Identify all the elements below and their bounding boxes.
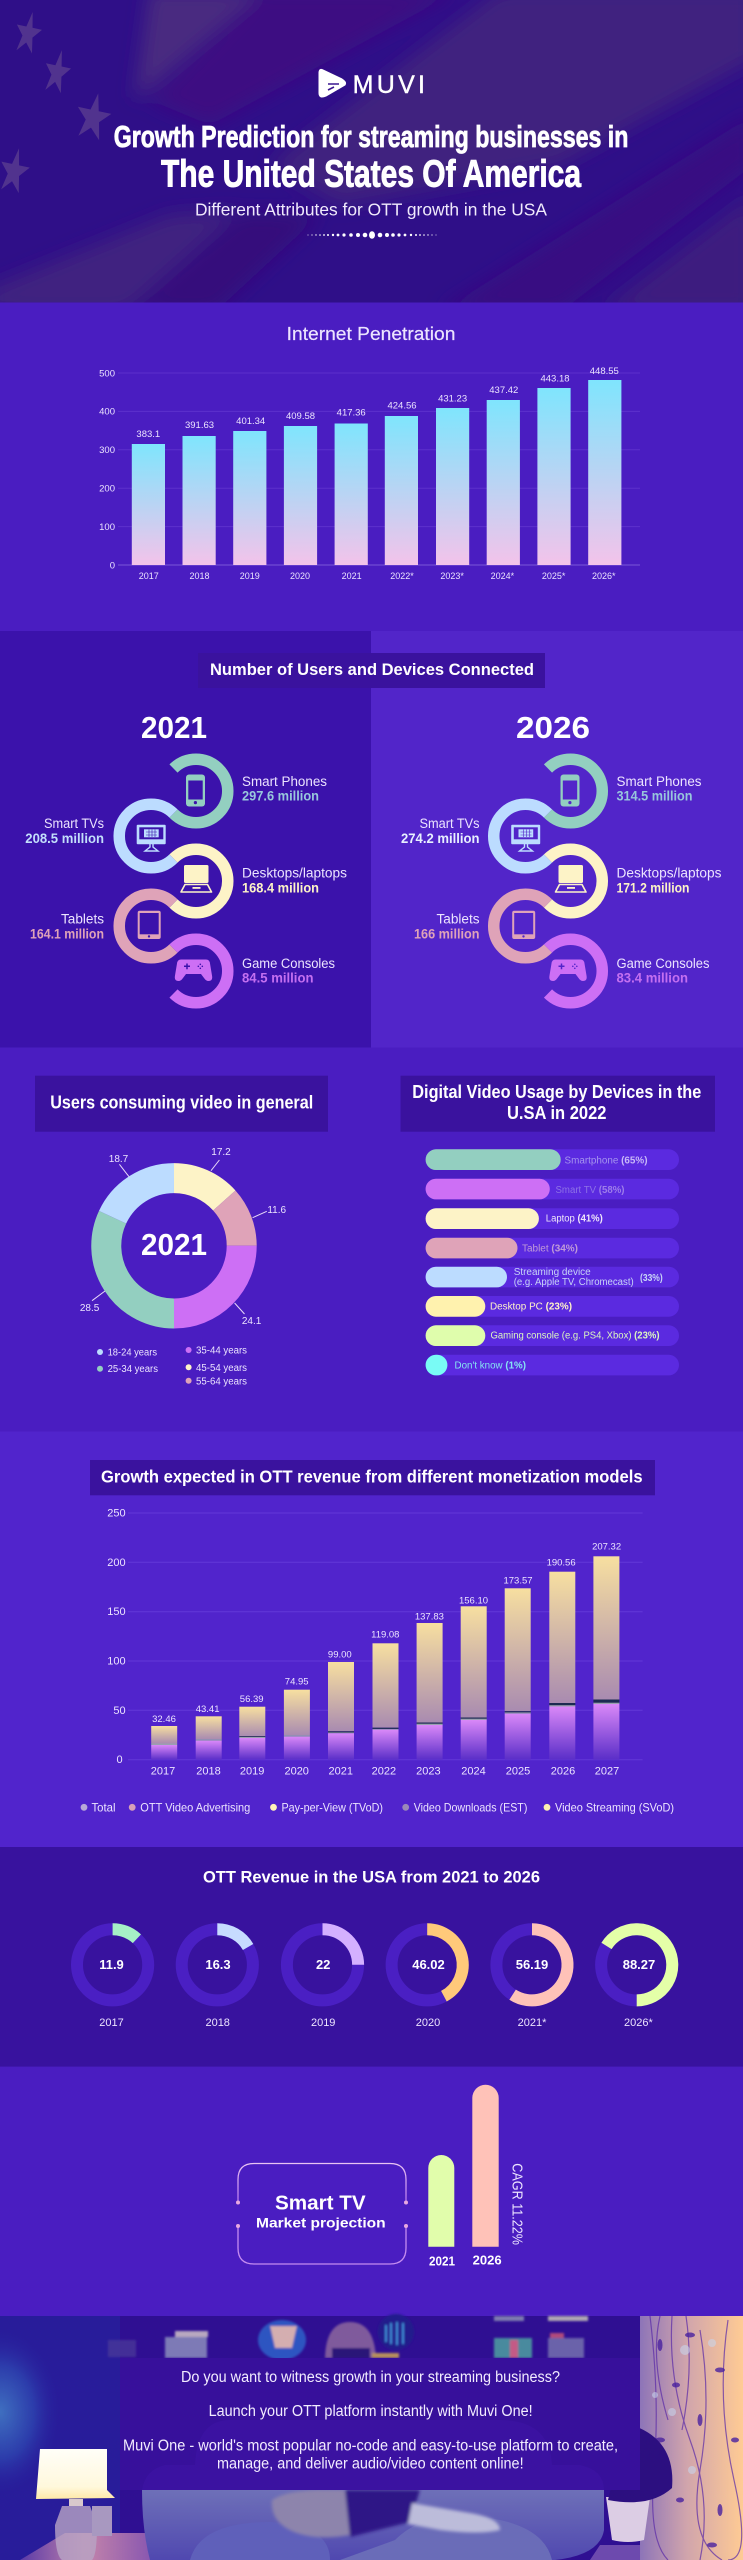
device labels 2026: Tablets — [436, 912, 480, 927]
callout: smart TV market projection: Smart TV — [275, 2192, 366, 2214]
bar chart: internet penetration: 431.23 — [438, 394, 467, 404]
heading: users and devices: Number of Users and Devices Connected — [210, 660, 534, 679]
bar list: device usage: Desktop PC (23%) — [490, 1302, 572, 1312]
bar chart: internet penetration: 448.55 — [590, 366, 619, 377]
device labels 2021: 168.4 million — [242, 880, 319, 895]
text overlay box — [120, 2358, 640, 2490]
bar chart: internet penetration: 383.1 — [136, 429, 160, 440]
stacked bar chart: monetization models: 207.32 — [592, 1542, 621, 1552]
device labels 2026: Desktops/laptops — [616, 866, 722, 881]
ring chart: revenue by year: 2026* — [624, 2017, 653, 2029]
ring chart: revenue by year: 2021* — [518, 2017, 547, 2029]
legend: monetization models: Video Streaming (SVoD) — [555, 1800, 674, 1814]
bar: 2021 smart TV: 2021 — [429, 2254, 455, 2269]
call to action text: Launch your OTT platform instantly with Muvi One! — [209, 2403, 533, 2420]
year 2021: 2021 — [141, 711, 207, 745]
bar: 2026 smart TV: 2026 — [473, 2252, 502, 2267]
bar list: device usage: (e.g. Apple TV, Chromecast) — [514, 1277, 634, 1288]
panel: OTT revenue rings — [0, 1847, 743, 2067]
plant and pot — [606, 2425, 672, 2542]
curtain — [640, 2316, 743, 2560]
panel: OTT revenue growth — [0, 1432, 743, 1847]
bar chart: internet penetration: 409.58 — [286, 411, 315, 422]
bar chart: internet penetration: 401.34 — [236, 416, 265, 427]
legend: age groups: 18-24 years — [108, 1348, 157, 1358]
heading: internet penetration: Internet Penetration — [287, 323, 455, 344]
stacked bar chart: monetization models: 99.00 — [328, 1650, 352, 1660]
device labels 2021: Smart TVs — [44, 816, 104, 831]
stacked bar chart: monetization models: 200 — [107, 1557, 126, 1569]
stacked bar chart: monetization models: 0 — [116, 1754, 123, 1766]
bar chart: internet penetration: 2017 — [139, 571, 159, 581]
panel: internet penetration — [0, 302, 743, 632]
stacked bar chart: monetization models: 74.95 — [285, 1676, 309, 1688]
stacked bar chart: monetization models: 32.46 — [152, 1714, 176, 1725]
device labels 2021: 164.1 million — [30, 926, 104, 941]
callout: smart TV market projection: Market projection — [256, 2214, 386, 2230]
legend: age groups: 55-64 years — [196, 1376, 247, 1387]
ring chart: revenue by year: 2019 — [311, 2017, 335, 2029]
stacked bar chart: monetization models: 137.83 — [415, 1612, 444, 1622]
bar chart: internet penetration: 100 — [99, 522, 115, 533]
stacked bar chart: monetization models: 190.56 — [547, 1558, 576, 1568]
stacked bar chart: monetization models: 43.41 — [196, 1704, 219, 1715]
bar chart: internet penetration: 2023* — [440, 571, 464, 581]
stacked bar chart: monetization models: 2018 — [196, 1766, 221, 1778]
stacked bar chart: monetization models: 173.57 — [503, 1576, 533, 1586]
bar chart: internet penetration: 2018 — [189, 571, 210, 581]
call to action text: Do you want to witness growth in your streaming business? — [181, 2369, 560, 2386]
stacked bar chart: monetization models: 150 — [107, 1606, 126, 1618]
device labels 2026: 83.4 million — [616, 970, 688, 986]
heading: OTT revenue growth: Growth expected in OTT revenue from different monetization models — [101, 1466, 643, 1486]
device labels 2021: 208.5 million — [25, 831, 104, 846]
bar list: device usage: Laptop (41%) — [546, 1214, 603, 1224]
stacked bar chart: monetization models: 2019 — [240, 1766, 264, 1778]
device labels 2021: Smart Phones — [242, 774, 327, 789]
callout: smart TV market projection — [236, 2164, 408, 2264]
bar list: device usage: Don't know (1%) — [454, 1360, 526, 1372]
legend: age groups: 25-34 years — [108, 1364, 158, 1375]
panel: users and devices 2026 — [371, 631, 743, 1048]
header panel — [0, 0, 743, 312]
ring chart: revenue by year: 22 — [316, 1957, 330, 1972]
bar chart: internet penetration: 2019 — [240, 571, 260, 581]
bar chart: internet penetration: 400 — [99, 406, 115, 418]
year 2026: 2026 — [516, 711, 590, 745]
legend: monetization models: OTT Video Advertising — [140, 1800, 250, 1814]
donut chart: age groups: 2021 — [141, 1228, 207, 1262]
ring chart: revenue by year: 16.3 — [205, 1957, 231, 1972]
person legs — [272, 2490, 500, 2537]
device labels 2026: Game Consoles — [616, 956, 710, 971]
bar list: device usage: Streaming device — [514, 1267, 591, 1278]
bar chart: internet penetration — [99, 366, 640, 581]
bookshelf and background objects — [108, 2314, 588, 2360]
heading: digital video usage — [400, 1076, 715, 1132]
sofa — [142, 2490, 604, 2560]
logo: Muvi — [319, 69, 425, 99]
device icons 2026 — [511, 774, 587, 981]
legend: age groups: 45-54 years — [196, 1363, 247, 1374]
bar list: device usage — [426, 1149, 679, 1375]
legend: monetization models: Pay-per-View (TVoD) — [282, 1800, 383, 1814]
heading: users consuming video: Users consuming video in general — [50, 1093, 313, 1113]
call to action text: Muvi One - world's most popular no-code and easy-to-use platform to create, — [123, 2438, 618, 2454]
heading: OTT revenue 2021 to 2026: OTT Revenue in the USA from 2021 to 2026 — [203, 1868, 540, 1886]
stacked bar chart: monetization models: 2022 — [372, 1766, 396, 1778]
heading: OTT revenue growth — [90, 1460, 655, 1495]
device rings 2026 — [494, 759, 602, 1003]
call to action text: manage, and deliver audio/video content online! — [217, 2456, 524, 2472]
donut chart: age groups: 18.7 — [109, 1154, 129, 1165]
donut chart: age groups: 11.6 — [267, 1205, 286, 1216]
bar chart: internet penetration: 391.63 — [185, 420, 214, 431]
legend: age groups: 35-44 years — [196, 1346, 247, 1356]
ring chart: revenue by year: 2020 — [416, 2017, 440, 2029]
bar chart: internet penetration: 2025* — [542, 571, 566, 581]
bar: 2026 smart TV — [472, 2085, 502, 2267]
bar list: device usage: Tablet (34%) — [522, 1244, 578, 1254]
ring chart: revenue by year: 2017 — [99, 2017, 124, 2029]
stacked bar chart: monetization models: 50 — [113, 1705, 126, 1717]
ring chart: revenue by year: 2018 — [205, 2017, 230, 2029]
device labels 2021: 297.6 million — [242, 788, 319, 804]
title — [114, 120, 628, 196]
floor — [20, 2533, 150, 2560]
legend: monetization models: Total — [92, 1800, 116, 1814]
device icons 2021 — [137, 774, 212, 981]
legend: monetization models: Video Downloads (EST) — [414, 1800, 527, 1814]
bar chart: internet penetration: 0 — [110, 560, 115, 572]
call to action text — [123, 2369, 618, 2472]
device labels 2026: 314.5 million — [616, 788, 692, 804]
panel: video usage — [0, 1048, 743, 1432]
device labels 2021: Tablets — [61, 912, 104, 927]
panel: footer photo — [0, 2314, 743, 2560]
bar chart: internet penetration: 500 — [99, 368, 115, 380]
legend: age groups — [97, 1346, 247, 1387]
device labels 2026: Smart TVs — [420, 816, 480, 831]
heading: digital video usage: U.SA in 2022 — [507, 1103, 606, 1123]
label: CAGR: CAGR 11.22% — [508, 2163, 524, 2245]
logo: Muvi: MUVI — [353, 71, 425, 99]
bar chart: internet penetration: 2020 — [290, 571, 310, 581]
bar chart: internet penetration: 2026* — [592, 571, 616, 581]
ring chart: revenue by year: 88.27 — [623, 1957, 655, 1972]
ring chart: revenue by year — [77, 1929, 672, 2029]
donut chart: age groups: 28.5 — [80, 1303, 100, 1314]
bar chart: internet penetration: 2021 — [342, 571, 362, 581]
bar chart: internet penetration: 443.18 — [540, 374, 570, 384]
title: The United States Of America — [161, 154, 582, 196]
stacked bar chart: monetization models: 2026 — [551, 1766, 575, 1778]
donut chart: age groups: 17.2 — [211, 1147, 231, 1158]
stacked bar chart: monetization models: 2027 — [595, 1766, 619, 1778]
bar list: device usage: (33%) — [640, 1273, 663, 1284]
bar chart: internet penetration: 2024* — [491, 571, 515, 581]
stacked bar chart: monetization models: 2025 — [506, 1766, 530, 1778]
icon: flag stars — [0, 9, 115, 194]
bar chart: internet penetration: 417.36 — [337, 408, 366, 418]
bar list: device usage: Gaming console (e.g. PS4, Xbox) (23%) — [490, 1330, 660, 1342]
bar list: device usage: Smart TV (58%) — [556, 1185, 624, 1196]
device labels 2021 — [25, 774, 347, 986]
heading: digital video usage: Digital Video Usage by Devices in the — [412, 1082, 701, 1102]
legend: monetization models — [81, 1800, 674, 1814]
donut chart: age groups: 24.1 — [242, 1316, 262, 1327]
device rings 2021 — [119, 759, 228, 1003]
bar: 2021 smart TV — [428, 2155, 455, 2269]
lamp — [36, 2449, 115, 2560]
ring chart: revenue by year: 11.9 — [99, 1957, 124, 1972]
device labels 2021: Desktops/laptops — [242, 866, 347, 881]
bar chart: internet penetration: 200 — [99, 484, 115, 494]
stacked bar chart: monetization models: 2024 — [461, 1766, 486, 1778]
ring chart: revenue by year: 56.19 — [516, 1957, 548, 1972]
device labels 2026: 171.2 million — [616, 880, 690, 895]
stacked bar chart: monetization models: 2023 — [416, 1766, 441, 1778]
heading: users and devices — [198, 653, 545, 688]
panel: users and devices 2021 — [0, 631, 371, 1048]
donut chart: age groups — [80, 1147, 286, 1327]
stacked bar chart: monetization models: 250 — [107, 1508, 126, 1520]
sofa silhouette in overlay — [142, 2420, 604, 2490]
stacked bar chart: monetization models: 2021 — [329, 1766, 353, 1778]
bar chart: internet penetration: 437.42 — [489, 385, 518, 396]
stacked bar chart: monetization models — [107, 1508, 643, 1778]
stacked bar chart: monetization models: 156.10 — [459, 1596, 488, 1606]
device labels 2026 — [401, 774, 722, 986]
bar list: device usage: Smartphone (65%) — [564, 1156, 648, 1166]
decorative dotted wave — [308, 231, 436, 239]
device labels 2021: Game Consoles — [242, 956, 335, 971]
device labels 2021: 84.5 million — [242, 970, 314, 986]
stacked bar chart: monetization models: 2017 — [151, 1766, 175, 1778]
bar chart: internet penetration: 424.56 — [387, 400, 417, 412]
bar chart: internet penetration: 300 — [99, 445, 115, 456]
device labels 2026: 274.2 million — [401, 831, 480, 846]
stacked bar chart: monetization models: 119.08 — [371, 1630, 399, 1640]
device labels 2026: 166 million — [414, 926, 480, 941]
panel: smart TV projection — [0, 2067, 743, 2316]
stacked bar chart: monetization models: 2020 — [284, 1766, 309, 1778]
stacked bar chart: monetization models: 100 — [107, 1656, 126, 1668]
bar chart: internet penetration: 2022* — [390, 571, 414, 581]
subtitle: Different Attributes for OTT growth in the USA — [195, 200, 547, 220]
device labels 2026: Smart Phones — [616, 774, 702, 789]
ring chart: revenue by year: 46.02 — [412, 1957, 445, 1972]
heading: users consuming video — [35, 1076, 328, 1132]
stacked bar chart: monetization models: 56.39 — [240, 1694, 264, 1705]
